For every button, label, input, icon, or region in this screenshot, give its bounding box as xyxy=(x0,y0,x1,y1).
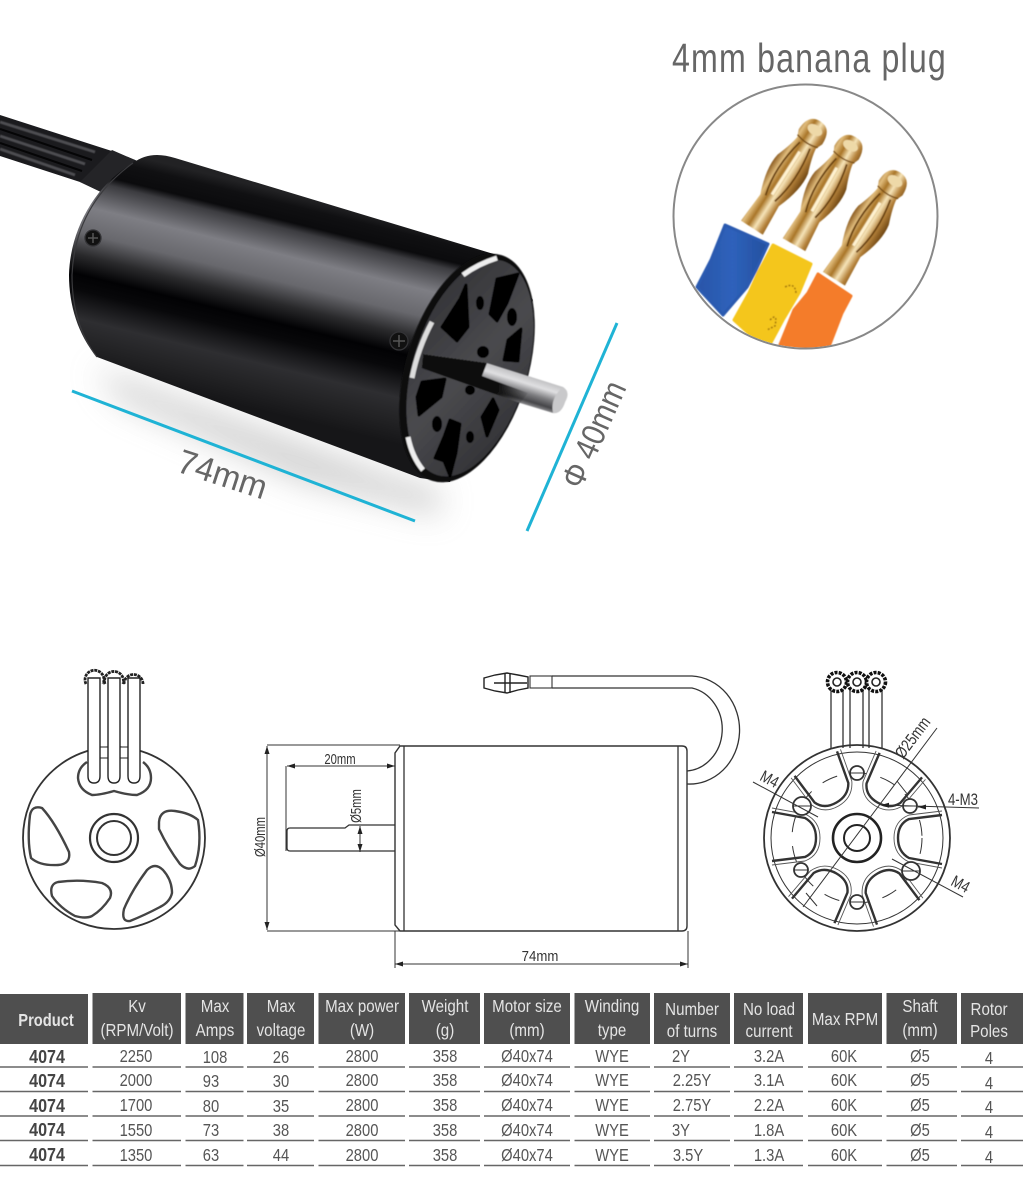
cable xyxy=(552,676,740,784)
table row 2250: 108 xyxy=(203,1048,227,1067)
table row 1550: Ø5 xyxy=(910,1121,930,1140)
table row 2000: 2000 xyxy=(120,1071,152,1090)
table row 1350: 2800 xyxy=(346,1146,378,1165)
table row 1550: 60K xyxy=(831,1121,857,1140)
hub xyxy=(833,814,881,862)
table row 1550 xyxy=(29,1119,993,1142)
table row 1700: Ø5 xyxy=(910,1096,930,1115)
table row 1350: 1350 xyxy=(120,1146,152,1165)
shaft xyxy=(287,825,395,851)
yellow sleeve xyxy=(734,245,811,350)
table header: (mm) xyxy=(902,1020,938,1040)
table header: voltage xyxy=(257,1020,305,1040)
label M4 upper: M4 xyxy=(757,767,782,792)
cable slot xyxy=(78,762,151,795)
table row 1700: 80 xyxy=(203,1097,219,1116)
table header: Winding xyxy=(585,996,639,1016)
motor front face xyxy=(374,237,560,499)
dimension 20mm xyxy=(286,750,395,851)
screw rear xyxy=(85,230,101,246)
motor cables xyxy=(0,115,140,195)
table row 2250 xyxy=(29,1046,993,1068)
table row 1350: 60K xyxy=(831,1146,857,1165)
table header: Max RPM xyxy=(812,1009,878,1029)
drawing: front view xyxy=(753,672,979,931)
table header: type xyxy=(598,1020,626,1040)
screw front xyxy=(390,332,408,350)
motor product photo xyxy=(0,115,568,515)
table row 1550: 38 xyxy=(273,1121,289,1140)
table row 1550: WYE xyxy=(595,1121,629,1140)
table header: of turns xyxy=(667,1021,717,1041)
table row 1700: 358 xyxy=(433,1096,457,1115)
dimension: 40mm diameter: Φ 40mm xyxy=(554,375,633,493)
table row 2250: Ø5 xyxy=(910,1047,930,1066)
table row 1350: 1.3A xyxy=(754,1146,784,1165)
table row 1350: WYE xyxy=(595,1146,629,1165)
table row 2250: 60K xyxy=(831,1047,857,1066)
table header: (W) xyxy=(350,1020,374,1040)
table row 1700: 35 xyxy=(273,1097,289,1116)
connector xyxy=(484,673,552,693)
drawing: rear view xyxy=(23,670,205,929)
table header: Kv xyxy=(128,996,147,1016)
table row 1700 xyxy=(29,1095,993,1117)
heading: banana plug: 4mm banana plug xyxy=(672,35,947,81)
table header: (g) xyxy=(436,1020,454,1040)
motor housing xyxy=(395,746,687,931)
orange sleeve xyxy=(777,274,851,352)
table row 2250: Ø40x74 xyxy=(501,1047,553,1066)
table row 2000: 2800 xyxy=(346,1071,378,1090)
motor cylinder body xyxy=(69,155,533,482)
table row 1700: 1700 xyxy=(120,1096,152,1115)
dimension 40mm xyxy=(251,745,400,931)
drawing: side view xyxy=(251,673,740,968)
table row 1350: 3.5Y xyxy=(673,1146,703,1165)
vent holes xyxy=(29,807,199,921)
table row 1550: 1.8A xyxy=(754,1121,784,1140)
cables xyxy=(831,685,882,748)
label M4 lower xyxy=(892,859,973,897)
dimension 25mm: Ø25mm xyxy=(891,714,935,762)
cable ends xyxy=(85,670,143,684)
table header: Shaft xyxy=(902,996,938,1016)
table header: Weight xyxy=(422,996,469,1016)
mounting holes xyxy=(793,766,920,909)
table row 1350: 44 xyxy=(273,1146,289,1165)
table header: Poles xyxy=(970,1021,1008,1041)
table row 1550: 3Y xyxy=(672,1121,690,1140)
table row 2250: 26 xyxy=(273,1048,289,1067)
table row 2000: WYE xyxy=(595,1071,629,1090)
dimension 5mm: Ø5mm xyxy=(347,789,364,823)
table row 2000: 4 xyxy=(985,1074,993,1093)
table row 1700: Ø40x74 xyxy=(501,1096,553,1115)
table header: Motor size xyxy=(492,996,562,1016)
label M4 upper xyxy=(753,767,818,817)
table row 1550: 2800 xyxy=(346,1121,378,1140)
specification table xyxy=(0,993,1023,1167)
table row 1350 xyxy=(29,1144,993,1167)
table row 2250: 4 xyxy=(985,1049,993,1068)
table row 1700: 4074 xyxy=(29,1095,65,1116)
table row 1700: 2.75Y xyxy=(673,1096,711,1115)
table row 2000: 358 xyxy=(433,1071,457,1090)
label 4-M3 xyxy=(881,791,979,809)
dimension: 74mm length xyxy=(72,391,415,521)
dimension 40mm: Ø40mm xyxy=(251,817,268,857)
table row 1550: 73 xyxy=(203,1121,219,1140)
plug 1 xyxy=(740,118,828,236)
table row 2250: 3.2A xyxy=(754,1047,784,1066)
plug 3 xyxy=(822,169,908,286)
blue sleeve xyxy=(697,225,768,315)
cable ends xyxy=(828,672,886,692)
window cutouts xyxy=(772,749,942,927)
table header: (RPM/Volt) xyxy=(100,1020,174,1040)
dimension 25mm xyxy=(803,714,937,907)
table row 1350: Ø40x74 xyxy=(501,1146,553,1165)
cables xyxy=(88,678,140,783)
table row 2000: 60K xyxy=(831,1071,857,1090)
outer rings xyxy=(764,745,950,931)
table row 2250: 358 xyxy=(433,1047,457,1066)
table row 1700: 2800 xyxy=(346,1096,378,1115)
table row 1550: Ø40x74 xyxy=(501,1121,553,1140)
table row 1550: 1550 xyxy=(120,1121,152,1140)
callout: banana plug close-up xyxy=(674,84,938,352)
dimension 74mm xyxy=(395,931,688,968)
table row 2000: 4074 xyxy=(29,1070,65,1091)
dimension 20mm: 20mm xyxy=(324,750,356,767)
table row 1700: 60K xyxy=(831,1096,857,1115)
table row 1700: WYE xyxy=(595,1096,629,1115)
table row 1700: 2.2A xyxy=(754,1096,784,1115)
table row 2000: Ø40x74 xyxy=(501,1071,553,1090)
plug 2 xyxy=(782,134,864,252)
table row 1350: 4 xyxy=(985,1148,993,1167)
table header xyxy=(0,993,1023,1044)
table row 1350: 4074 xyxy=(29,1144,65,1165)
table row 2250: WYE xyxy=(595,1047,629,1066)
table row 2000 xyxy=(29,1070,993,1093)
table header: No load xyxy=(743,999,795,1019)
row separators xyxy=(0,1067,1023,1166)
dimension: 74mm length: 74mm xyxy=(173,443,272,507)
table header: Max xyxy=(201,996,230,1016)
table header: Rotor xyxy=(971,999,1008,1019)
table row 1700: 4 xyxy=(985,1098,993,1117)
table row 1350: 63 xyxy=(203,1146,219,1165)
label M4 lower: M4 xyxy=(948,872,973,897)
table header: current xyxy=(746,1021,793,1041)
table row 2000: 93 xyxy=(203,1072,219,1091)
table row 2000: Ø5 xyxy=(910,1071,930,1090)
motor shaft xyxy=(422,354,568,413)
motor cast shadow xyxy=(95,368,440,515)
dimension 74mm: 74mm xyxy=(522,947,558,964)
table header: (mm) xyxy=(509,1020,545,1040)
dimension: 40mm diameter xyxy=(527,323,633,531)
table row 1550: 4074 xyxy=(29,1119,65,1140)
hub xyxy=(90,814,138,862)
table row 2000: 2.25Y xyxy=(673,1071,711,1090)
table row 1550: 4 xyxy=(985,1123,993,1142)
table header: Max xyxy=(267,996,296,1016)
table header: Amps xyxy=(196,1020,234,1040)
table row 1550: 358 xyxy=(433,1121,457,1140)
table row 2250: 2250 xyxy=(120,1047,152,1066)
table row 2250: 2Y xyxy=(672,1047,690,1066)
table header: Product xyxy=(18,1011,74,1030)
table row 2000: 3.1A xyxy=(754,1071,784,1090)
table header: Max power xyxy=(325,996,399,1016)
table header: Number xyxy=(665,999,719,1019)
table row 1350: 358 xyxy=(433,1146,457,1165)
table row 2250: 4074 xyxy=(29,1046,65,1067)
table row 1350: Ø5 xyxy=(910,1146,930,1165)
table row 2000: 30 xyxy=(273,1072,289,1091)
label 4-M3: 4-M3 xyxy=(948,791,978,809)
table row 2250: 2800 xyxy=(346,1047,378,1066)
dimension 5mm xyxy=(347,789,364,852)
